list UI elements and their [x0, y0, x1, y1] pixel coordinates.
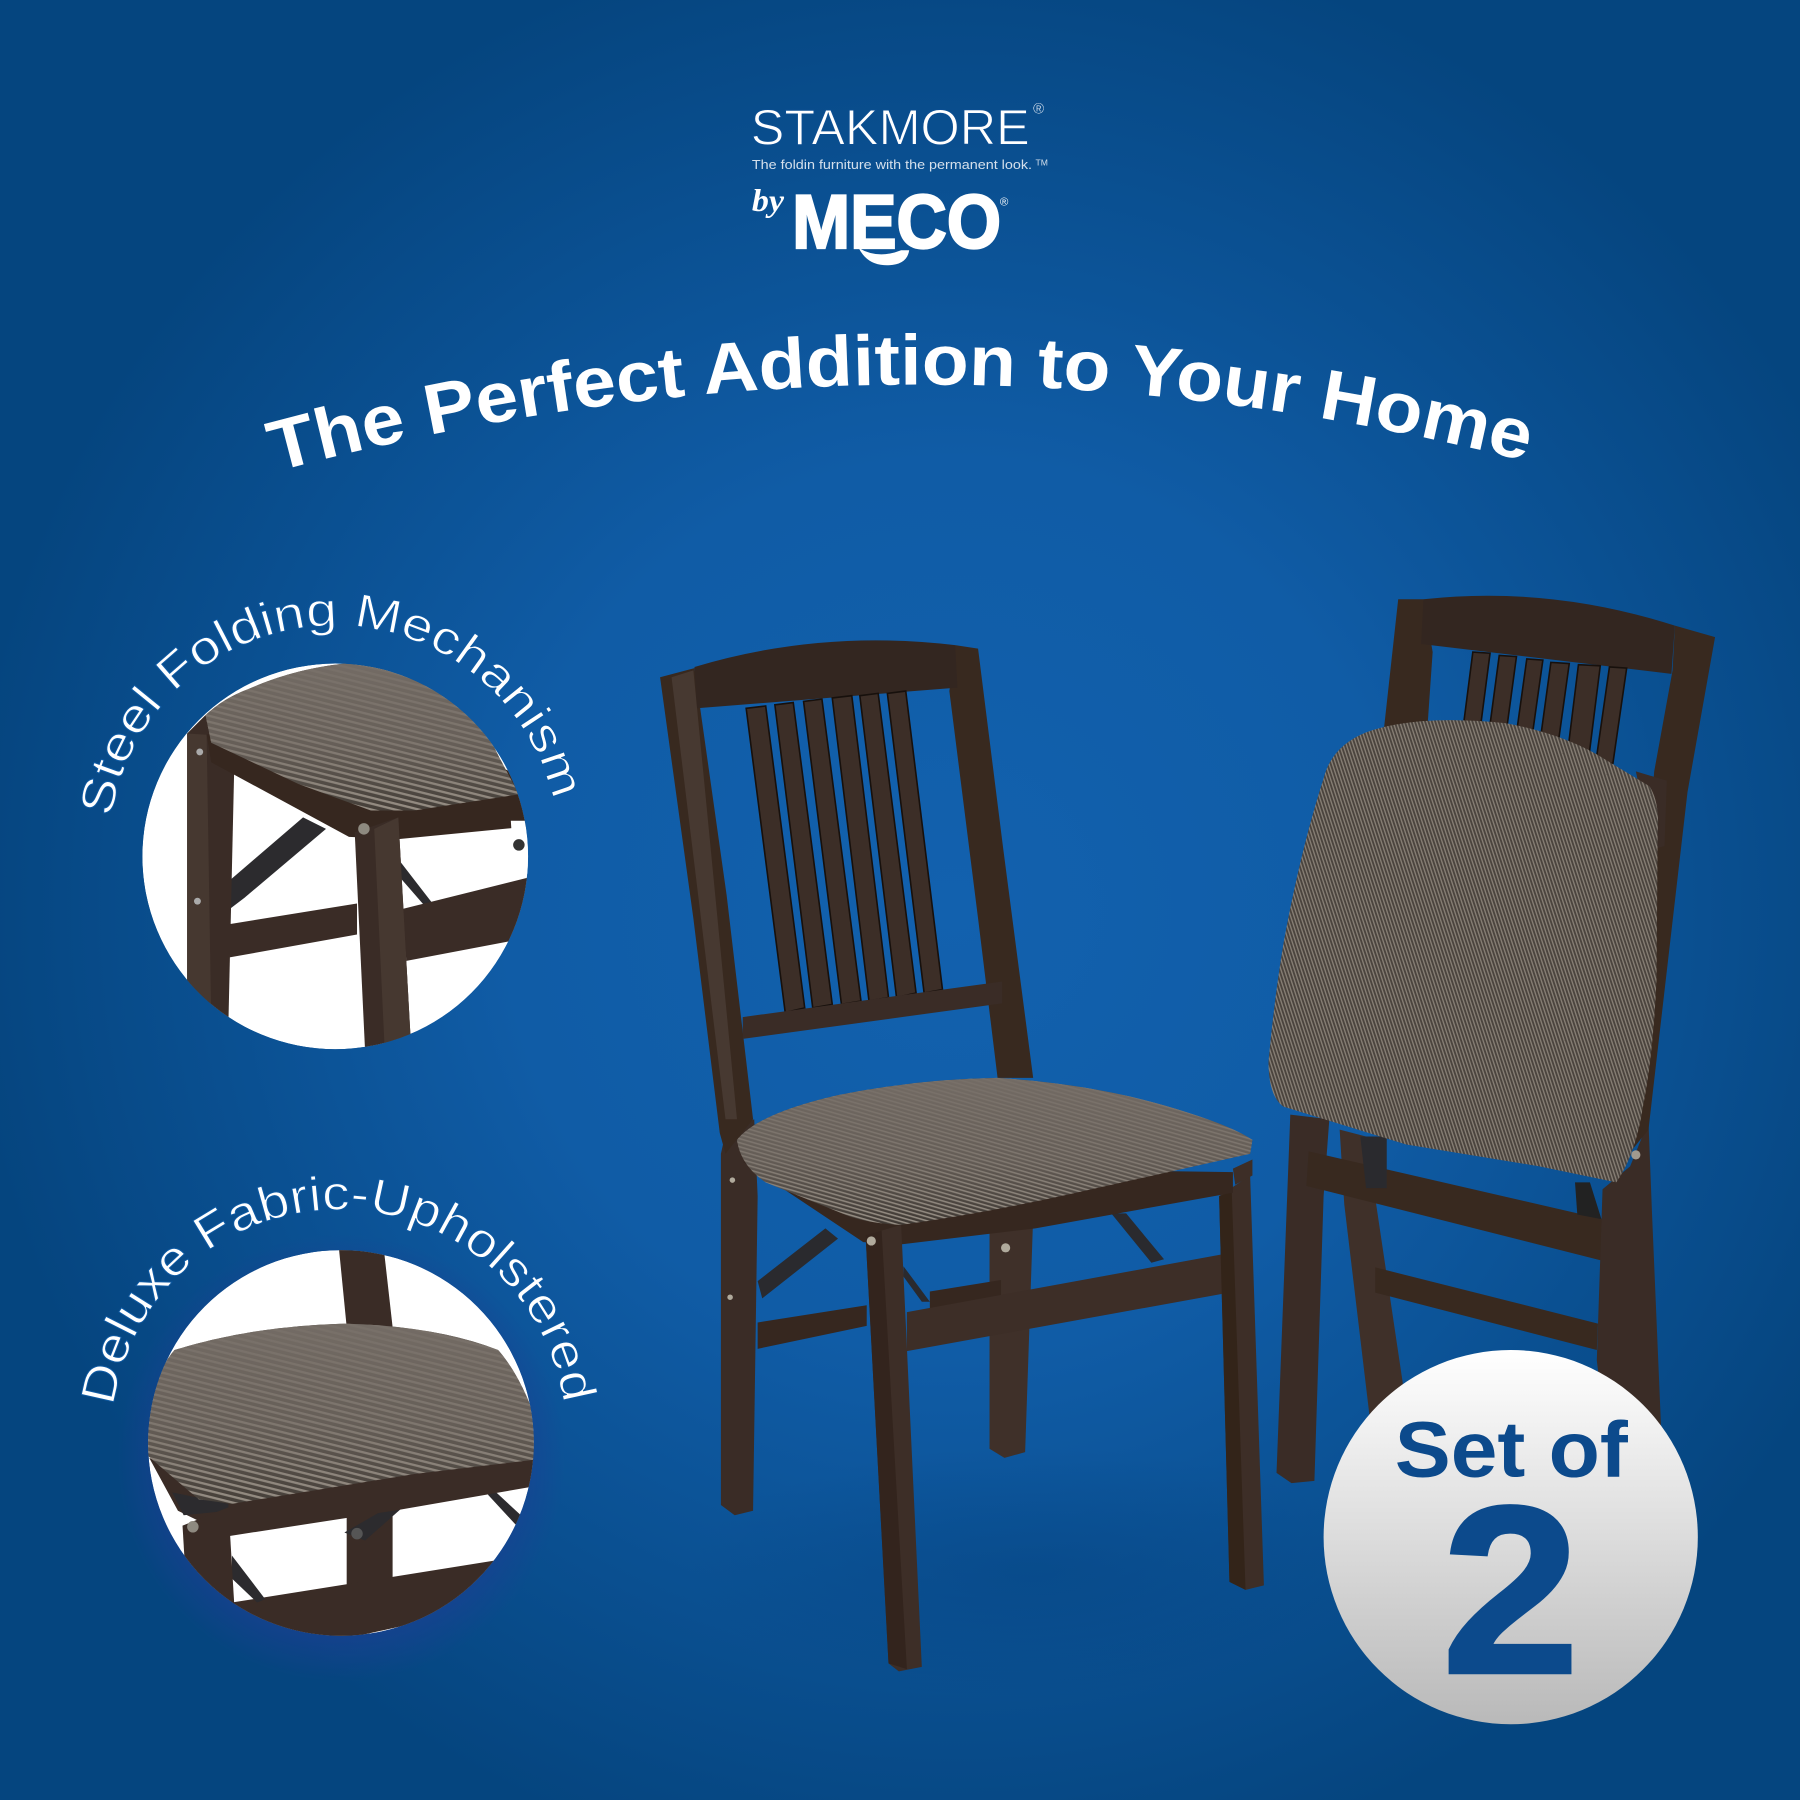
title: The Perfect Addition to Your Home: [264, 333, 1529, 468]
badge: Set of 2: [1324, 1350, 1698, 1724]
logo: Stakmore by Meco: by: [752, 182, 785, 218]
folded chair bolt: [1631, 1150, 1640, 1159]
detail circle: steel folding mechanism: [142, 664, 540, 1050]
logo: Stakmore by Meco: [751, 100, 1048, 265]
chair seat apron and front leg: [743, 1159, 1252, 1671]
logo: Stakmore by Meco: TM: [1035, 157, 1048, 167]
badge: Set of 2: Set of: [1395, 1404, 1628, 1493]
glow behind second detail circle: [117, 1234, 565, 1682]
chair bolts: [727, 1177, 1010, 1300]
logo: Stakmore by Meco: ®: [1033, 101, 1044, 118]
folded chair legs: [1277, 1115, 1661, 1483]
label: Steel Folding Mechanism: Steel Folding Mechanism: [82, 594, 575, 814]
folded chair back frame: [1383, 596, 1715, 1159]
chair: open: [660, 640, 1264, 1671]
logo: Stakmore by Meco: MECO: [792, 180, 1001, 265]
detail circle: fabric upholstery: [143, 1246, 540, 1642]
logo: Stakmore by Meco: ®: [1000, 196, 1009, 208]
chair legs and stretchers: [721, 1119, 1264, 1590]
logo: Stakmore by Meco: The foldin furniture with the permanent look.: [752, 157, 1032, 172]
chair: folded: [1268, 596, 1715, 1483]
chair back frame: [660, 640, 1033, 1154]
chair seat cushion: [737, 1078, 1252, 1225]
label: Deluxe Fabric-Upholstered: Deluxe Fabric-Upholstered: [81, 1176, 598, 1402]
logo: Stakmore by Meco: STAKMORE: [751, 100, 1030, 156]
badge: Set of 2: 2: [1442, 1457, 1580, 1724]
floor shadow: [689, 1446, 1378, 1699]
folded chair seat cushion: [1268, 720, 1658, 1182]
